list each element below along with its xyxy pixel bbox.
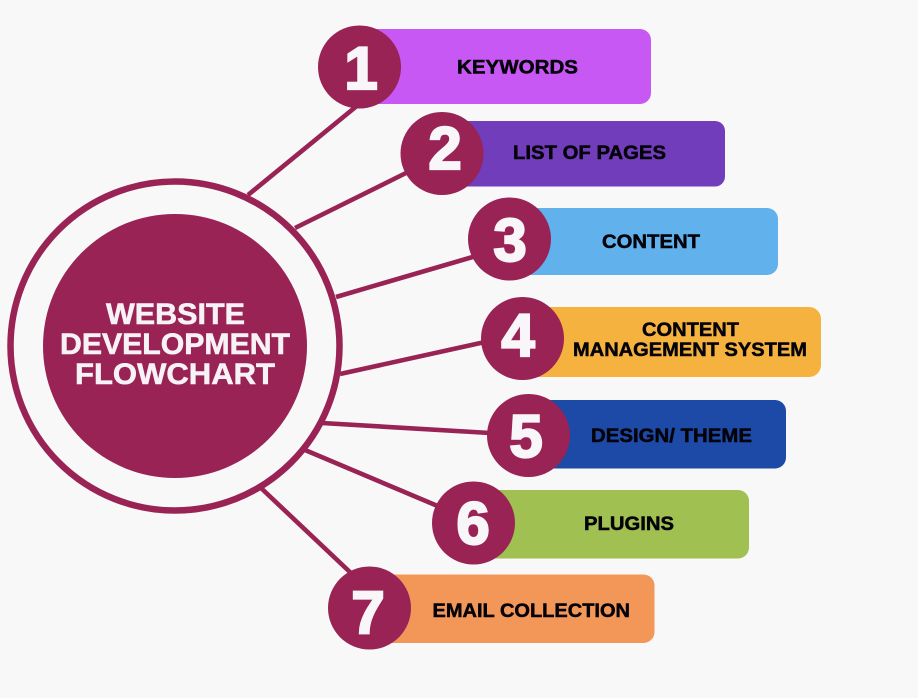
hub title: WEBSITE xyxy=(106,298,245,331)
label 4 xyxy=(573,319,807,361)
badge 6 xyxy=(432,482,515,564)
badge 3 xyxy=(468,198,551,280)
label 4: MANAGEMENT SYSTEM xyxy=(573,339,807,361)
label 6: PLUGINS xyxy=(584,513,674,535)
bar 2 xyxy=(442,121,725,186)
hub inner disc xyxy=(43,214,307,478)
step 1: keywords xyxy=(318,26,651,108)
bar 1 xyxy=(359,29,651,104)
label 4: CONTENT xyxy=(642,319,739,341)
label 3: CONTENT xyxy=(602,231,700,253)
number 3: 3 xyxy=(493,207,527,274)
step 3: content xyxy=(468,198,778,280)
label 1: KEYWORDS xyxy=(457,56,578,78)
bar 4 xyxy=(523,307,821,377)
number 2: 2 xyxy=(428,115,462,182)
label 7: EMAIL COLLECTION xyxy=(432,600,630,622)
hub title: FLOWCHART xyxy=(75,358,275,391)
hub outer ring xyxy=(10,182,340,510)
number 7: 7 xyxy=(351,579,385,646)
step 4: content management system xyxy=(481,297,821,380)
label 2: LIST OF PAGES xyxy=(513,142,666,164)
number 6: 6 xyxy=(456,490,490,557)
central hub xyxy=(10,182,340,510)
badge 4 xyxy=(481,297,564,380)
step 5: design / theme xyxy=(487,394,786,477)
bar 3 xyxy=(509,208,778,275)
step 2: list of pages xyxy=(400,112,725,195)
number 5: 5 xyxy=(509,403,543,470)
number 1: 1 xyxy=(344,35,378,102)
badge 2 xyxy=(400,112,484,195)
label 5: DESIGN/ THEME xyxy=(591,425,752,447)
badge 1 xyxy=(318,26,401,108)
step 7: email collection xyxy=(328,566,654,650)
step 6: plugins xyxy=(432,482,749,564)
badge 5 xyxy=(487,394,570,477)
bar 7 xyxy=(369,574,654,643)
bar 6 xyxy=(473,490,749,558)
connector lines xyxy=(248,105,490,574)
hub title: DEVELOPMENT xyxy=(60,328,290,361)
badge 7 xyxy=(328,566,411,650)
bar 5 xyxy=(528,400,786,468)
hub title xyxy=(60,298,290,391)
number 4: 4 xyxy=(501,302,535,369)
